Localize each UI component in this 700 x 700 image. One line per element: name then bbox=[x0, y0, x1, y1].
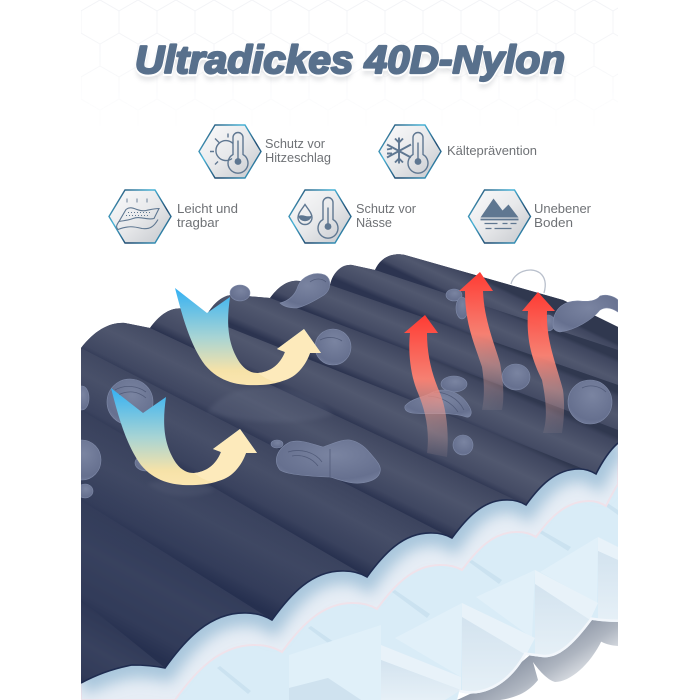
arrow: heat left bbox=[404, 315, 448, 457]
feature: Schutz vor Nässe bbox=[289, 190, 416, 243]
label: Schutz vor bbox=[356, 202, 416, 216]
label: Kälteprävention bbox=[447, 144, 537, 158]
label: tragbar bbox=[177, 216, 219, 230]
contour marks on droplets bbox=[115, 279, 606, 477]
arrow: cool air top bbox=[175, 288, 321, 385]
feature: Unebener Boden bbox=[468, 190, 591, 243]
title: Ultradickes 40D-Nylon bbox=[135, 40, 565, 84]
icon: snowflake and thermometer bbox=[379, 125, 441, 178]
label: Leicht und bbox=[177, 202, 238, 216]
feature: Kälteprävention bbox=[379, 125, 537, 178]
icon: water drop and thermometer bbox=[289, 190, 351, 243]
icon: mountains and ground bbox=[468, 190, 530, 243]
mattress bbox=[81, 250, 618, 700]
bubble outline bbox=[511, 270, 545, 293]
feature: Schutz vor Hitzeschlag bbox=[199, 125, 331, 178]
underside shadow bbox=[457, 612, 618, 700]
title: Ultradickes 40D-Nylon bbox=[135, 39, 565, 82]
icon: fabric layers with arrows bbox=[109, 190, 171, 243]
label: Nässe bbox=[356, 216, 392, 230]
infographic bbox=[81, 0, 618, 700]
water droplets bbox=[63, 274, 618, 498]
background hexagon pattern bbox=[81, 0, 618, 62]
label: Unebener bbox=[534, 202, 591, 216]
white foam cells bbox=[81, 444, 618, 700]
dark nylon ribs bbox=[81, 250, 618, 700]
feature: Leicht und tragbar bbox=[109, 190, 238, 243]
icon: sun and thermometer bbox=[199, 125, 261, 178]
arrow: heat right bbox=[522, 292, 564, 433]
label: Boden bbox=[534, 216, 573, 230]
arrow: heat middle bbox=[459, 272, 503, 410]
label: Schutz vor bbox=[265, 137, 325, 151]
label: Hitzeschlag bbox=[265, 151, 331, 165]
title: Ultradickes 40D-Nylon bbox=[135, 45, 565, 88]
arrow: cool air bottom bbox=[111, 388, 257, 485]
